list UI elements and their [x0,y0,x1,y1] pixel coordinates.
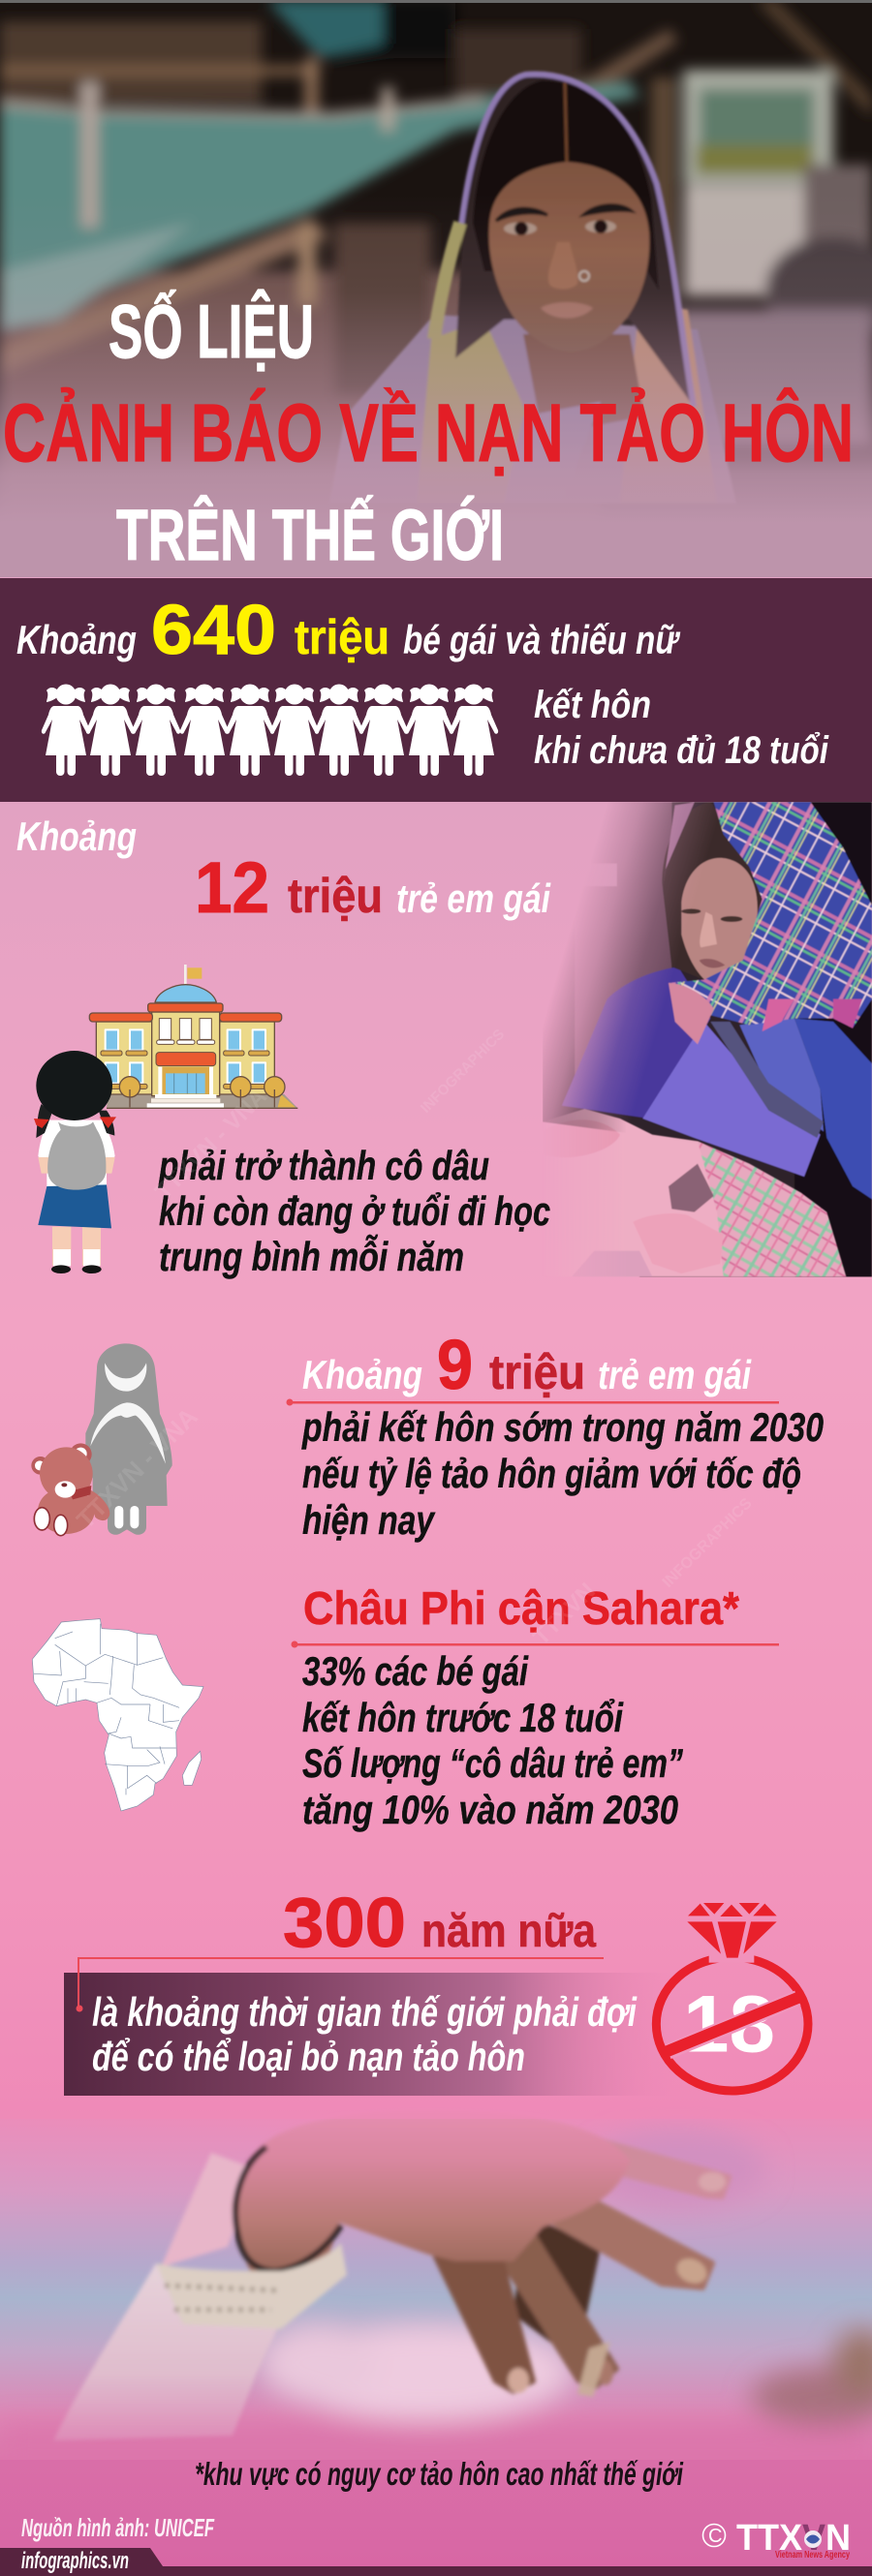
icon: diamond ring with crossed 18: 18 [683,1978,775,2069]
photo: child hand with wedding ring [0,2101,872,2465]
logo: TTXVN: TTXVN [736,2518,851,2559]
panel: 12 million: Khoảng [16,813,137,859]
icon: grey girl silhouette [85,1343,172,1535]
icon: schoolgirl from behind [34,1051,116,1273]
watermarks: INFOGRAPHICS [660,1495,756,1591]
text: must become brides: phải trở thành cô dâu [158,1143,489,1188]
stat heading: 640 million: triệu [295,610,389,664]
stat: 12 million girls [195,847,551,928]
watermarks [71,1026,756,1650]
stat: 12 million girls: trẻ em gái [396,875,551,921]
title [3,289,854,575]
panel: 300 more years [64,1885,808,2096]
panel: 640 million girls [0,578,872,802]
stat: 12 million girls: triệu [288,869,383,923]
text: years to wait: để có thể loại bỏ nạn tảo hôn [92,2034,525,2079]
text: years to wait: là khoảng thời gian thế giới phải đợi [92,1989,638,2035]
stat: 9 million girls: 9 [437,1327,473,1404]
stat: 9 million girls [302,1327,752,1404]
hero photo: girl in a hut [0,0,872,581]
text: years to wait [92,1989,638,2079]
footer strip with website [0,2548,872,2576]
text: Africa stats: tăng 10% vào năm 2030 [302,1787,678,1832]
stat: 9 million girls: trẻ em gái [598,1352,752,1397]
text: Africa stats: 33% các bé gái [302,1648,529,1694]
icon: diamond ring with crossed 18 [656,1903,808,2091]
icon: school building [89,965,297,1109]
footer strip with website: infographics.vn [21,2548,129,2574]
gradient bar [64,1973,684,2096]
watermarks: INFOGRAPHICS [418,1026,508,1117]
text: must become brides: khi còn đang ở tuổi đi học [159,1188,550,1234]
panel: 9 million [31,1327,824,1543]
stat: 12 million girls: 12 [195,847,269,928]
text: 2030 projection [301,1404,824,1543]
stat heading: 300 [283,1885,406,1962]
text: married before 18: kết hôn [534,684,651,726]
icon: row of ten girls [42,684,498,776]
watermarks: TTXVN [528,1579,601,1650]
text: 2030 projection: hiện nay [302,1497,436,1543]
photo: young mother with baby [543,802,872,1277]
stat heading: 640 million: 640 [151,592,276,669]
panel: 12 million [16,813,551,1279]
stat: 9 million girls: triệu [489,1345,585,1399]
logo: TTXVN: C [708,2526,722,2547]
watermarks: TTXVN - VNA [150,1084,272,1205]
icon: map of Africa [32,1619,203,1811]
image source credit: Nguồn hình ảnh: UNICEF [21,2513,215,2542]
text: married before 18 [534,684,829,772]
stat heading: 640 million: Khoảng [16,617,137,662]
icon: teddy bear [31,1443,109,1536]
title: TRÊN THẾ GIỚI [116,495,504,575]
watermarks: TTXVN - VNA [71,1401,203,1534]
stat heading [283,1885,596,1962]
text: must become brides: trung bình mỗi năm [159,1233,464,1279]
title: SỐ LIỆU [109,289,314,374]
panel: Sub-Saharan Africa [32,1583,779,1832]
text: Africa stats: Số lượng “cô dâu trẻ em” [302,1740,683,1786]
child hand [53,2110,729,2440]
text: must become brides [158,1143,550,1279]
stat heading: 640 million: bé gái và thiếu nữ [403,617,680,662]
stat: 9 million girls: Khoảng [302,1352,422,1397]
text: Africa stats: kết hôn trước 18 tuổi [302,1695,624,1740]
stat heading: năm nữa [421,1906,596,1957]
text: Africa stats [302,1648,683,1832]
heading: Châu Phi cận Sahara* [303,1583,739,1635]
stat heading: 640 million [16,592,680,669]
